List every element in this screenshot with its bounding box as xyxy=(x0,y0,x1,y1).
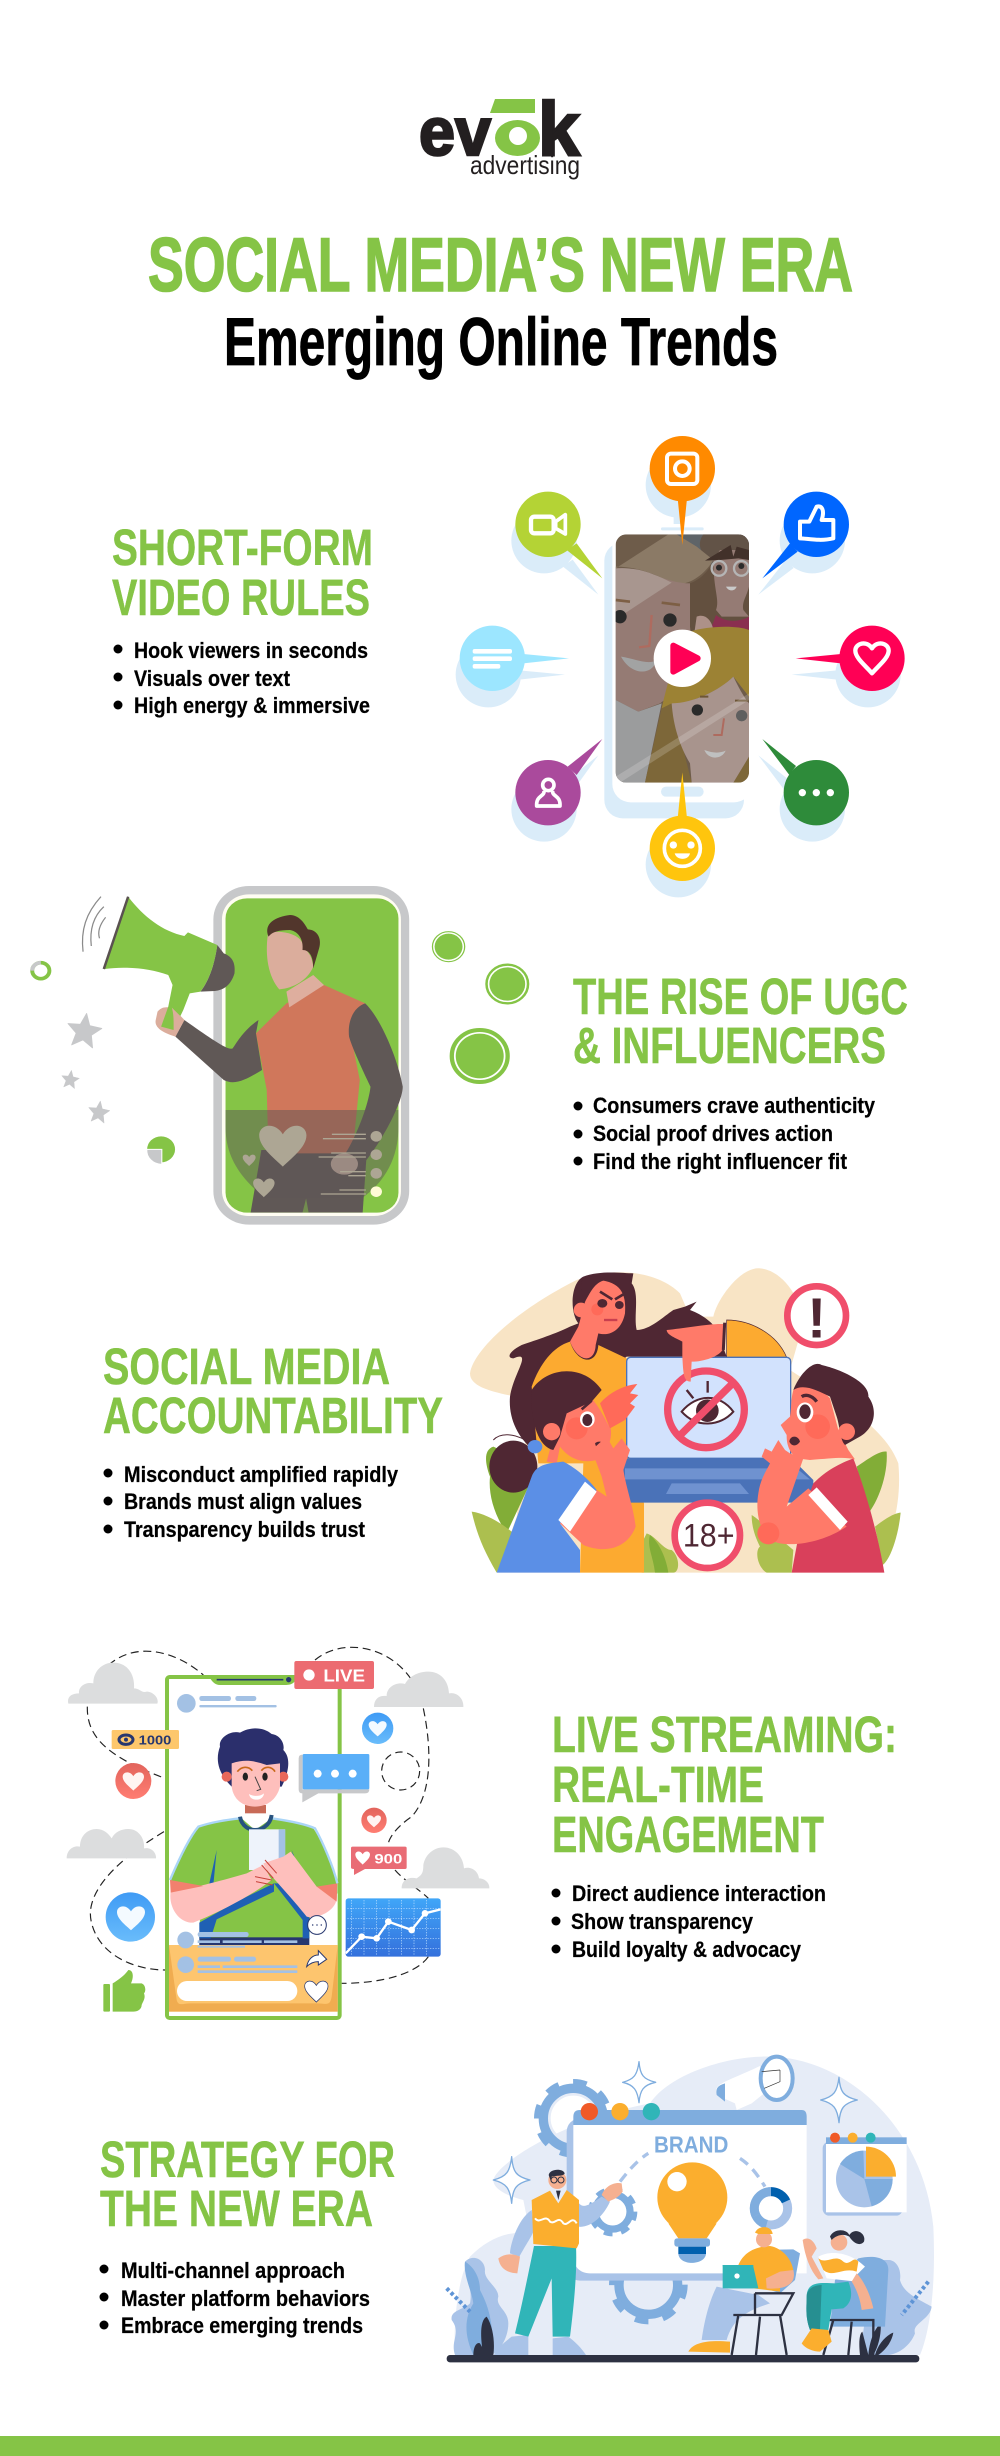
foliage xyxy=(447,2258,932,2355)
footer green bar xyxy=(0,2436,1000,2456)
megaphone xyxy=(82,897,235,1037)
heading: strategy for the new era: THE NEW ERA xyxy=(100,2180,373,2237)
icon: smiley xyxy=(650,816,715,881)
background blob xyxy=(455,2057,934,2355)
heading: rise of UGC: & INFLUENCERS xyxy=(573,1017,886,1074)
bullet list: accountability: Transparency builds trust xyxy=(124,1517,366,1542)
dashed connection paths xyxy=(87,1647,429,1983)
trust overlay band xyxy=(226,1110,398,1198)
likes badge 900: 900 xyxy=(374,1851,403,1867)
hearts and reaction dots xyxy=(243,1126,382,1197)
bullet list: live streaming: Build loyalty & advocacy xyxy=(572,1937,802,1962)
icon: green thumbs up xyxy=(103,1970,145,2012)
girl xyxy=(489,1371,638,1573)
chat bubble xyxy=(299,1754,369,1802)
seated woman xyxy=(802,2230,888,2355)
illustration: influencer with megaphone xyxy=(32,886,528,1225)
bullet list: UGC xyxy=(574,1093,876,1174)
heading: strategy for the new era: STRATEGY FOR xyxy=(100,2131,395,2188)
illustration: phone with social media icons xyxy=(456,436,905,897)
bullet list: UGC: Social proof drives action xyxy=(593,1121,833,1146)
cream background blob xyxy=(470,1268,899,1573)
heading: social media accountability xyxy=(103,1338,443,1444)
warning badge xyxy=(787,1286,846,1350)
icon: chat dots xyxy=(784,760,849,825)
icon: instagram xyxy=(650,436,715,501)
bullet list: live streaming xyxy=(552,1881,826,1962)
bullet list: strategy: Multi-channel approach xyxy=(121,2258,345,2283)
18+ badge: 18+ xyxy=(683,1518,734,1554)
illustration: brand strategy team xyxy=(447,2057,934,2362)
icon: video camera xyxy=(515,492,581,557)
heading: social media accountability: ACCOUNTABILITY xyxy=(103,1387,443,1444)
presenter xyxy=(494,2170,623,2355)
18+ badge xyxy=(675,1503,740,1568)
growth chart xyxy=(346,1898,441,1957)
decorative stars xyxy=(60,1011,111,1124)
panel: UGC and influencers text xyxy=(573,968,908,1174)
icon: heart xyxy=(839,626,905,691)
panel: strategy text xyxy=(100,2131,395,2338)
pie icon xyxy=(147,1136,175,1164)
brand label: BRAND xyxy=(654,2132,728,2158)
bullet list: short-form video xyxy=(114,638,370,718)
bullet list: live streaming: Direct audience interaction xyxy=(572,1881,826,1906)
pointing hand xyxy=(667,1323,725,1382)
bullet list: short-form video: Hook viewers in seconds xyxy=(134,638,368,663)
phone with stream screen xyxy=(167,1675,340,2018)
laptop xyxy=(623,1357,813,1503)
bullet list: accountability: Brands must align values xyxy=(124,1489,362,1514)
bullet list: strategy: Embrace emerging trends xyxy=(121,2313,363,2338)
heading: short-form video rules: SHORT-FORM xyxy=(112,519,373,576)
reaction hearts xyxy=(106,1713,393,1942)
likes badge 900 xyxy=(351,1847,407,1875)
viewer count badge xyxy=(112,1730,179,1749)
logo: evok advertising: ev xyxy=(419,94,491,170)
arms and head xyxy=(175,915,403,1170)
lower screen panel xyxy=(169,1916,338,2012)
viewer count badge: 1000 xyxy=(139,1732,171,1747)
heading: strategy for the new era xyxy=(100,2131,395,2237)
clouds xyxy=(67,1663,489,1888)
bullet list: strategy: Master platform behaviors xyxy=(121,2286,370,2311)
light bulb xyxy=(620,2153,765,2263)
heading: short-form video rules xyxy=(112,519,373,626)
pie chart window xyxy=(823,2133,907,2216)
heading: live streaming xyxy=(552,1706,897,1863)
phone shadow and body xyxy=(456,452,901,897)
LIVE badge: LIVE xyxy=(323,1665,365,1685)
prohibited eye icon xyxy=(668,1371,744,1448)
warning badge: ! xyxy=(807,1287,826,1350)
heading: rise of UGC xyxy=(573,968,908,1074)
heading: live streaming: LIVE STREAMING: xyxy=(552,1706,897,1763)
heading: short-form video rules: VIDEO RULES xyxy=(112,569,370,626)
gears xyxy=(538,2083,684,2320)
bullet list: short-form video: Visuals over text xyxy=(134,666,291,691)
subtitle: Emerging Online Trends xyxy=(224,304,778,380)
icon: play button xyxy=(654,630,711,687)
icon: comment lines xyxy=(460,626,525,691)
megaphone xyxy=(716,2057,793,2110)
sparkle stars xyxy=(493,2062,857,2203)
bullet list: short-form video: High energy & immersive xyxy=(134,693,370,718)
heading: live streaming: REAL-TIME xyxy=(552,1756,764,1813)
live streamer xyxy=(170,1728,337,1945)
bullet list: strategy xyxy=(100,2258,370,2338)
plants xyxy=(472,1447,901,1573)
progress ring xyxy=(32,963,49,979)
panel: short-form video text xyxy=(112,519,373,718)
small gear xyxy=(591,2190,635,2234)
bullet list: accountability xyxy=(104,1462,399,1542)
seated man with laptop xyxy=(688,2227,800,2355)
icon: thumbs up xyxy=(784,492,849,557)
logo: evok advertising: k xyxy=(538,87,581,172)
panel: accountability text xyxy=(103,1338,443,1542)
heading: live streaming: ENGAGEMENT xyxy=(552,1806,824,1863)
presentation screen xyxy=(567,2103,807,2281)
bullet list: UGC: Find the right influencer fit xyxy=(593,1149,848,1174)
ground line xyxy=(447,2355,919,2362)
LIVE badge xyxy=(294,1661,374,1689)
pointer tails xyxy=(523,498,841,818)
icon: profile xyxy=(515,760,581,825)
bullet list: live streaming: Show transparency xyxy=(571,1909,754,1934)
logo: evok advertising: advertising xyxy=(470,150,580,180)
woman xyxy=(510,1272,787,1573)
heading: social media accountability: SOCIAL MEDIA xyxy=(103,1338,390,1395)
bullet list: UGC: Consumers crave authenticity xyxy=(593,1093,876,1118)
boy xyxy=(757,1364,884,1573)
phone frame xyxy=(213,886,409,1225)
illustration: family and restricted content xyxy=(470,1268,901,1573)
green bubbles xyxy=(432,932,528,1082)
panel: live streaming text xyxy=(552,1706,897,1962)
influencer figure xyxy=(251,985,367,1213)
donut chart xyxy=(754,2192,788,2225)
bullet list: accountability: Misconduct amplified rapidly xyxy=(124,1462,399,1487)
illustration: live streaming phone xyxy=(67,1647,489,2018)
video screen with faces xyxy=(613,534,749,783)
logo: evok advertising xyxy=(419,87,581,180)
